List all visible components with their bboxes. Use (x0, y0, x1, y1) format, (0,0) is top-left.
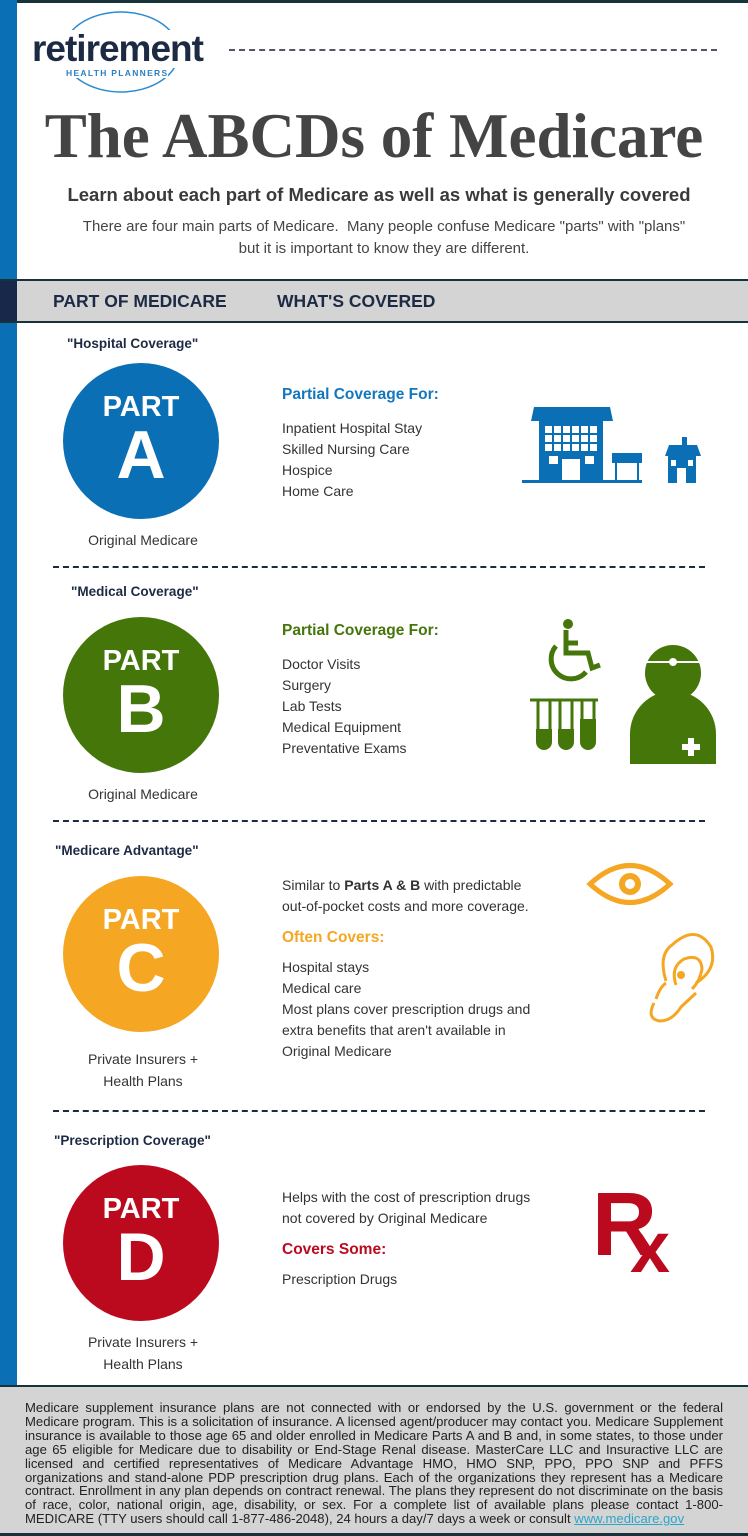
icon: Rx: R (592, 1175, 657, 1275)
coverage A: Skilled Nursing Care (282, 441, 410, 457)
caption A: Original Medicare (88, 532, 198, 548)
label C: "Medicare Advantage" (55, 843, 199, 858)
icon: wheelchair, tubes, doctor (530, 619, 716, 764)
coverage C: out-of-pocket costs and more coverage. (282, 898, 529, 914)
label A: "Hospital Coverage" (67, 336, 198, 351)
coverage C: Hospital stays (282, 959, 369, 975)
logo (32, 11, 204, 93)
coverage D: Prescription Drugs (282, 1271, 397, 1287)
circle D: PART (103, 1193, 179, 1225)
coverage A (282, 386, 439, 499)
coverage B: Doctor Visits (282, 656, 360, 672)
footer disclaimer: Medicare supplement insurance plans are not connected with or endorsed by the U.S. government or the federal Medicare program. This is a solicitation of insurance. A licensed agent/producer may contact you. Medicare Supplement insurance is available to those age 65 and older enrolled in Medicare Parts A and B and, in some states, to those under age 65 eligible for Medicare due to disability or End-Stage Renal disease. MasterCare LLC and Insuractive LLC are licensed and certified representatives of Medicare Advantage HMO, HMO SNP, PPO, PPO SNP and PFFS organizations and stand-alone PDP prescription drug plans. Each of the organizations they represent has a Medicare contract. Enrollment in any plan depends on contract renewal. The plans they represent do not discriminate on the basis of race, color, national origin, age, disability, or sex. For a complete list of available plans please contact 1-800-MEDICARE (TTY users should call 1-877-486-2048), 24 hours a day/7 days a week or consult www.medicare.gov (25, 1400, 723, 1526)
top border (0, 0, 748, 3)
coverage C: Medical care (282, 980, 361, 996)
caption D (88, 1334, 198, 1372)
left blue bar (0, 0, 17, 1386)
coverage D (282, 1189, 530, 1287)
label B: "Medical Coverage" (71, 584, 199, 599)
coverage C (282, 877, 530, 1059)
coverage A: Inpatient Hospital Stay (282, 420, 422, 436)
caption B: Original Medicare (88, 786, 198, 802)
icon: eye and ear (586, 862, 714, 1022)
caption D: Health Plans (103, 1356, 183, 1372)
intro text: There are four main parts of Medicare. Many people confuse Medicare "parts" with "plans" (83, 218, 685, 235)
coverage A: Hospice (282, 462, 333, 478)
panel: Part B (63, 584, 716, 802)
coverage C: Similar to Parts A & B with predictable (282, 877, 521, 893)
circle A: A (116, 417, 166, 493)
coverage C: Often Covers: (282, 929, 384, 946)
coverage B (282, 622, 439, 756)
coverage D: Helps with the cost of prescription drugs (282, 1189, 530, 1205)
circle C: PART (103, 904, 179, 936)
circle A (63, 363, 219, 519)
icon: hospital and house (522, 407, 701, 483)
circle D (63, 1165, 219, 1321)
logo: retirement (32, 28, 203, 69)
label D: "Prescription Coverage" (54, 1133, 211, 1148)
circle B: PART (103, 645, 179, 677)
coverage B: Medical Equipment (282, 719, 401, 735)
intro text (83, 218, 685, 257)
caption C: Private Insurers + (88, 1051, 198, 1067)
circle C: C (116, 930, 166, 1006)
coverage A: Home Care (282, 483, 354, 499)
title: The ABCDs of Medicare (45, 101, 703, 171)
caption D: Private Insurers + (88, 1334, 198, 1350)
intro text: but it is important to know they are different. (239, 240, 529, 257)
coverage D: Covers Some: (282, 1241, 386, 1258)
circle C (63, 876, 219, 1032)
coverage B: Preventative Exams (282, 740, 406, 756)
logo dotted line (229, 49, 717, 51)
circle A: PART (103, 391, 179, 423)
caption C: Health Plans (103, 1073, 183, 1089)
panel: Part D (54, 1133, 670, 1372)
table header bar: WHAT'S COVERED (277, 291, 435, 311)
circle B: B (116, 671, 166, 747)
circle D: D (116, 1219, 166, 1295)
caption C (88, 1051, 198, 1089)
panel: Part C (55, 843, 714, 1089)
coverage C: Original Medicare (282, 1043, 392, 1059)
coverage C: extra benefits that aren't available in (282, 1022, 506, 1038)
table header bar: PART OF MEDICARE (53, 291, 227, 311)
icon: Rx: x (630, 1208, 670, 1288)
coverage B: Surgery (282, 677, 331, 693)
panel: Part A (63, 336, 701, 548)
coverage B: Lab Tests (282, 698, 342, 714)
coverage B: Partial Coverage For: (282, 622, 439, 639)
table header bar (0, 279, 748, 323)
logo: HEALTH PLANNERS (66, 68, 168, 78)
coverage C: Most plans cover prescription drugs and (282, 1001, 530, 1017)
coverage D: not covered by Original Medicare (282, 1210, 487, 1226)
circle B (63, 617, 219, 773)
coverage A: Partial Coverage For: (282, 386, 439, 403)
subtitle: Learn about each part of Medicare as well as what is generally covered (67, 184, 691, 205)
